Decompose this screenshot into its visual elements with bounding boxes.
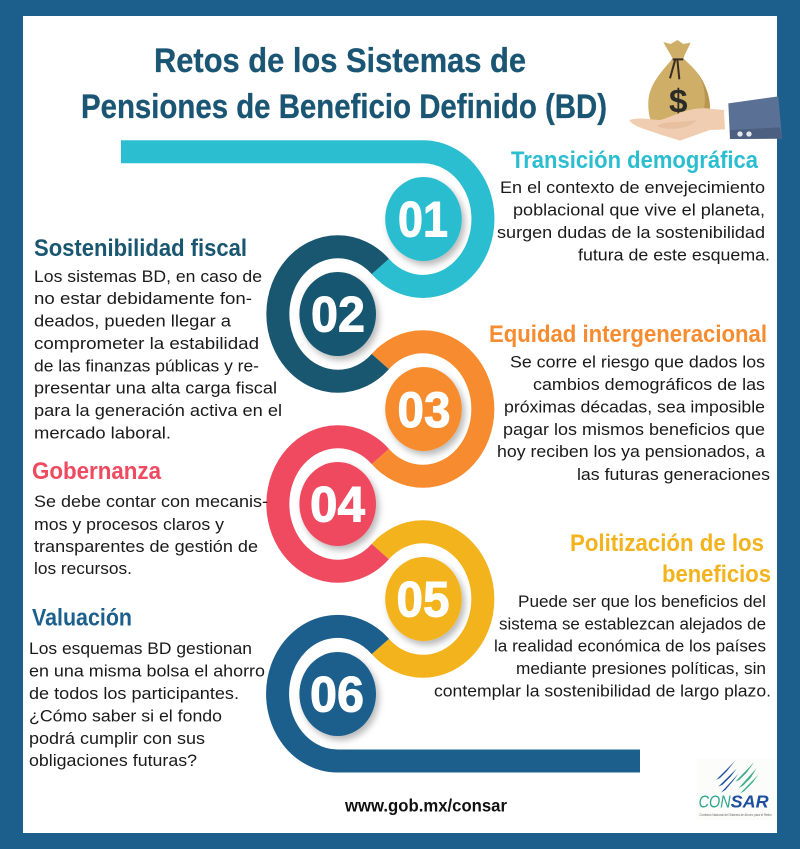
body text: Puede ser que los beneficios del [518, 592, 766, 611]
spiral timeline [121, 152, 640, 761]
heading: Gobernanza [32, 458, 162, 485]
badge 06: 06 [310, 667, 364, 723]
ring 04 [278, 437, 380, 571]
body text: ¿Cómo saber si el fondo [29, 706, 222, 726]
body text: sistema se establezcan alejados de [499, 614, 766, 634]
body text: mercado laboral. [34, 424, 171, 442]
heading: beneficios [662, 561, 771, 588]
body text [34, 492, 268, 578]
logo: CONSAR [697, 758, 775, 820]
body text: presentar una alta carga fiscal [34, 379, 277, 398]
body text: mos y procesos claros y [34, 515, 225, 534]
badge 02 [299, 272, 376, 356]
badge 03 [385, 367, 462, 451]
heading: Transición demográfica [511, 147, 759, 174]
panel: Sostenibilidad fiscal [34, 235, 282, 442]
badge 03: 03 [398, 382, 450, 438]
panel: Politización de los beneficios [434, 530, 771, 701]
icon: hand holding money bag [629, 40, 782, 141]
ring 05 [380, 532, 483, 666]
ring 02 [278, 247, 380, 381]
body text: Se corre el riesgo que dados los [510, 353, 765, 372]
body text: pagar los mismos beneficios que [503, 420, 765, 439]
body text: comprometer la estabilidad [34, 334, 259, 353]
ring 03 [380, 342, 483, 476]
heading [570, 530, 771, 588]
badge 01 [385, 177, 462, 261]
panel: Valuación [29, 605, 265, 770]
body text: Los sistemas BD, en caso de [34, 267, 262, 286]
logo: CONSAR: Comisión Nacional del Sistema de Ahorro para el Retiro [699, 812, 772, 817]
panel: Gobernanza [32, 458, 268, 578]
body text: los recursos. [34, 559, 132, 578]
body text: de todos los participantes. [29, 684, 239, 703]
title: Pensiones de Beneficio Definido (BD) [81, 88, 607, 126]
body text: hoy reciben los ya pensionados, a [497, 442, 766, 461]
heading: Equidad intergeneracional [489, 321, 767, 348]
body text: para la generación activa en el [34, 401, 282, 420]
badge 04: 04 [310, 477, 365, 533]
body text: de las finanzas públicas y re- [34, 356, 259, 376]
body text: la realidad económica de los países [494, 637, 766, 656]
ring 06 [278, 626, 640, 761]
body text: transparentes de gestión de [34, 537, 258, 556]
heading: Sostenibilidad fiscal [34, 235, 247, 262]
body text: surgen dudas de la sostenibilidad [497, 223, 765, 242]
body text [497, 353, 770, 484]
title [81, 42, 607, 126]
body text: las futuras generaciones [577, 465, 770, 484]
body text: Los esquemas BD gestionan [29, 639, 252, 658]
body text: en una misma bolsa el ahorro [29, 662, 265, 680]
ring 01 [121, 152, 483, 286]
badge 02: 02 [311, 287, 365, 343]
body text [29, 639, 265, 770]
badge 04 [299, 462, 376, 546]
heading: Politización de los [570, 530, 764, 557]
body text: deados, pueden llegar a [34, 312, 232, 331]
body text [497, 178, 770, 264]
icon: hand holding money bag: $ [669, 84, 688, 121]
body text: próximas décadas, sea imposible [504, 398, 765, 417]
website url: www.gob.mx/consar [344, 796, 507, 816]
body text: podrá cumplir con sus [29, 729, 205, 748]
body text: cambios demográficos de las [533, 375, 765, 394]
body text: contemplar la sostenibilidad de largo plazo. [434, 682, 771, 701]
panel: Equidad intergeneracional [489, 321, 770, 484]
badge 05: 05 [396, 572, 450, 628]
body text: Se debe contar con mecanis- [34, 492, 268, 511]
body text: obligaciones futuras? [29, 751, 197, 770]
body text [434, 592, 771, 701]
logo: CONSAR: CON [699, 791, 731, 811]
body text [34, 267, 282, 442]
body text: mediante presiones políticas, sin [516, 659, 766, 678]
logo: CONSAR: SAR [731, 791, 769, 811]
panel: Transición demográfica [497, 147, 770, 264]
title: Retos de los Sistemas de [154, 42, 526, 80]
heading: Valuación [32, 605, 132, 632]
body text: En el contexto de envejecimiento [500, 178, 765, 197]
badge 06 [299, 652, 376, 736]
body text: no estar debidamente fon- [34, 289, 252, 308]
badge 01: 01 [398, 192, 448, 248]
body text: futura de este esquema. [578, 246, 770, 264]
badge 05 [385, 557, 462, 641]
body text: poblacional que vive el planeta, [513, 200, 765, 220]
